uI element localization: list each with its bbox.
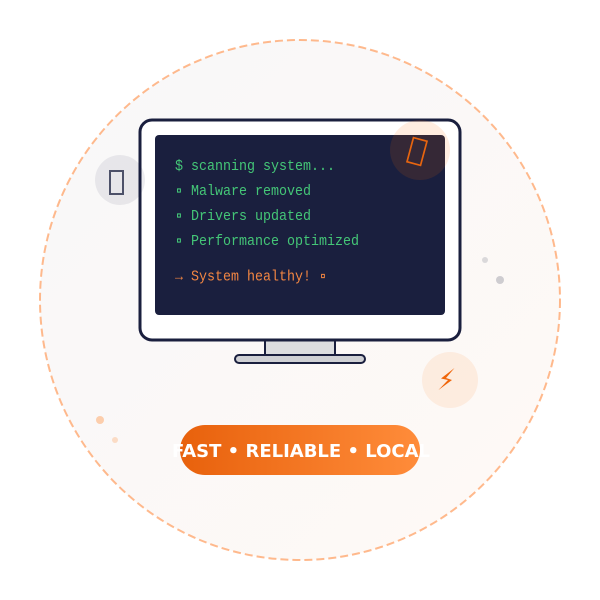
monitor frame	[140, 120, 460, 340]
icon: shield badge	[95, 155, 145, 205]
monitor screen	[155, 135, 445, 315]
terminal line: drivers: ▫ Drivers updated	[175, 209, 311, 225]
terminal line: malware: ▫ Malware removed	[175, 184, 311, 200]
tagline pill	[172, 425, 430, 475]
icon: lightning badge	[422, 352, 478, 408]
monitor stand	[265, 340, 335, 355]
icon: tool badge	[390, 120, 450, 180]
background dashed circle	[40, 40, 560, 560]
terminal line: healthy: → System healthy! ▫	[175, 269, 327, 286]
terminal line: scanning: $ scanning system...	[175, 159, 335, 175]
terminal line: performance: ▫ Performance optimized	[175, 234, 359, 250]
decorative dots right	[482, 257, 504, 284]
terminal text	[175, 159, 359, 286]
monitor	[140, 120, 460, 363]
tagline text: FAST • RELIABLE • LOCAL	[172, 441, 430, 462]
monitor base	[235, 355, 365, 363]
decorative dots left	[96, 416, 118, 443]
